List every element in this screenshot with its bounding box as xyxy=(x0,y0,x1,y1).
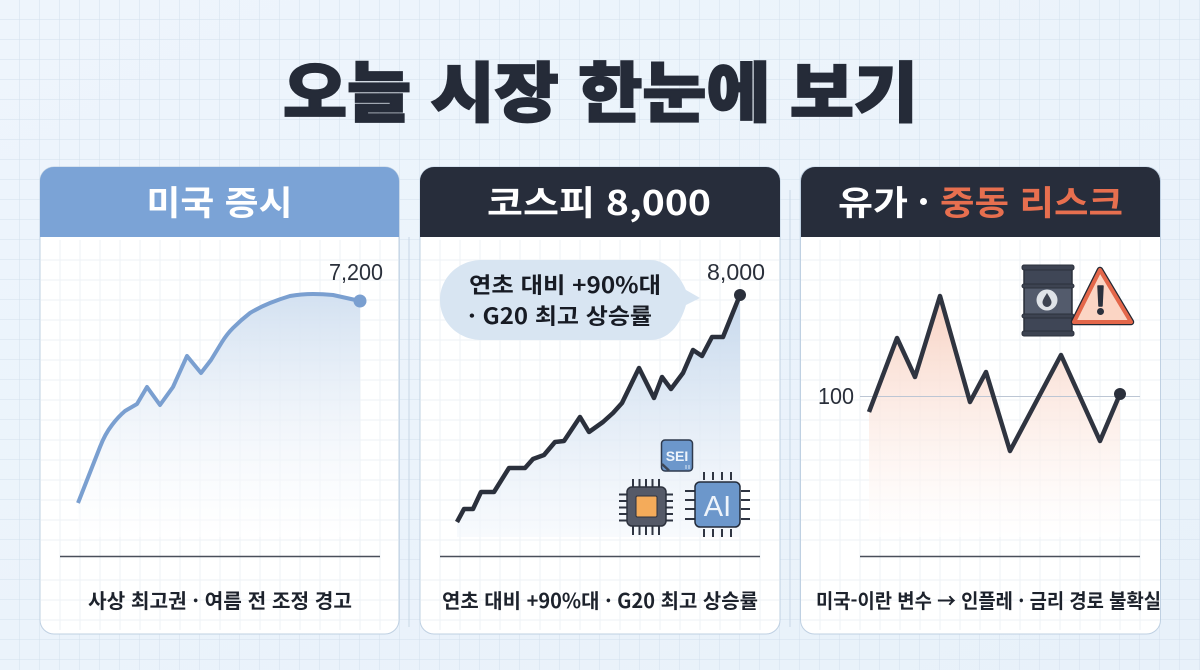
panel: 유가 중동 리스크 xyxy=(800,167,1161,634)
callout: · G20 최고 상승률 xyxy=(468,299,652,331)
value label: 8,000 xyxy=(707,259,765,285)
line chart: US index xyxy=(78,294,366,537)
panel grid xyxy=(41,240,398,630)
value label: 7,200 xyxy=(329,259,383,285)
axis line xyxy=(440,556,760,558)
icon: SEI chip xyxy=(662,440,692,471)
line chart: KOSPI xyxy=(457,289,746,537)
panel heading accent: 중동 리스크 xyxy=(940,176,1123,225)
panel header xyxy=(420,167,780,237)
callout: 연초 대비 +90%대 xyxy=(469,268,661,300)
panel: 미국 증시 xyxy=(40,167,399,634)
callout xyxy=(440,260,700,340)
panel header xyxy=(801,167,1160,237)
icon: processor chip xyxy=(619,479,673,535)
icon: AI chip xyxy=(685,472,750,537)
axis line xyxy=(860,556,1140,558)
panel: 코스피 8,000 xyxy=(420,167,780,634)
panel heading: 코스피 8,000 xyxy=(487,176,711,225)
footer text: 연초 대비 +90%대 · G20 최고 상승률 xyxy=(442,585,758,614)
panel header xyxy=(40,167,399,237)
footer text: 사상 최고권 · 여름 전 조정 경고 xyxy=(88,585,352,614)
value label: 100 xyxy=(818,383,854,409)
title: 오늘 시장 한눈에 보기 xyxy=(283,41,918,135)
panel grid xyxy=(421,240,779,630)
panel heading: 유가 xyxy=(838,176,908,225)
panel heading: 미국 증시 xyxy=(146,176,292,225)
icon: SEI chip: SEI xyxy=(666,448,688,464)
panel card xyxy=(40,167,399,634)
line chart: oil price xyxy=(860,296,1140,537)
heading dot xyxy=(920,198,927,205)
icon: warning triangle xyxy=(1074,270,1131,322)
axis line xyxy=(60,556,380,558)
panel card xyxy=(800,167,1160,634)
icon: AI chip: AI xyxy=(704,491,731,523)
icon: oil barrel xyxy=(1022,265,1074,336)
panel grid xyxy=(801,240,1160,630)
panel card xyxy=(420,167,780,634)
footer text: 미국-이란 변수 → 인플레 · 금리 경로 불확실 xyxy=(816,585,1161,614)
